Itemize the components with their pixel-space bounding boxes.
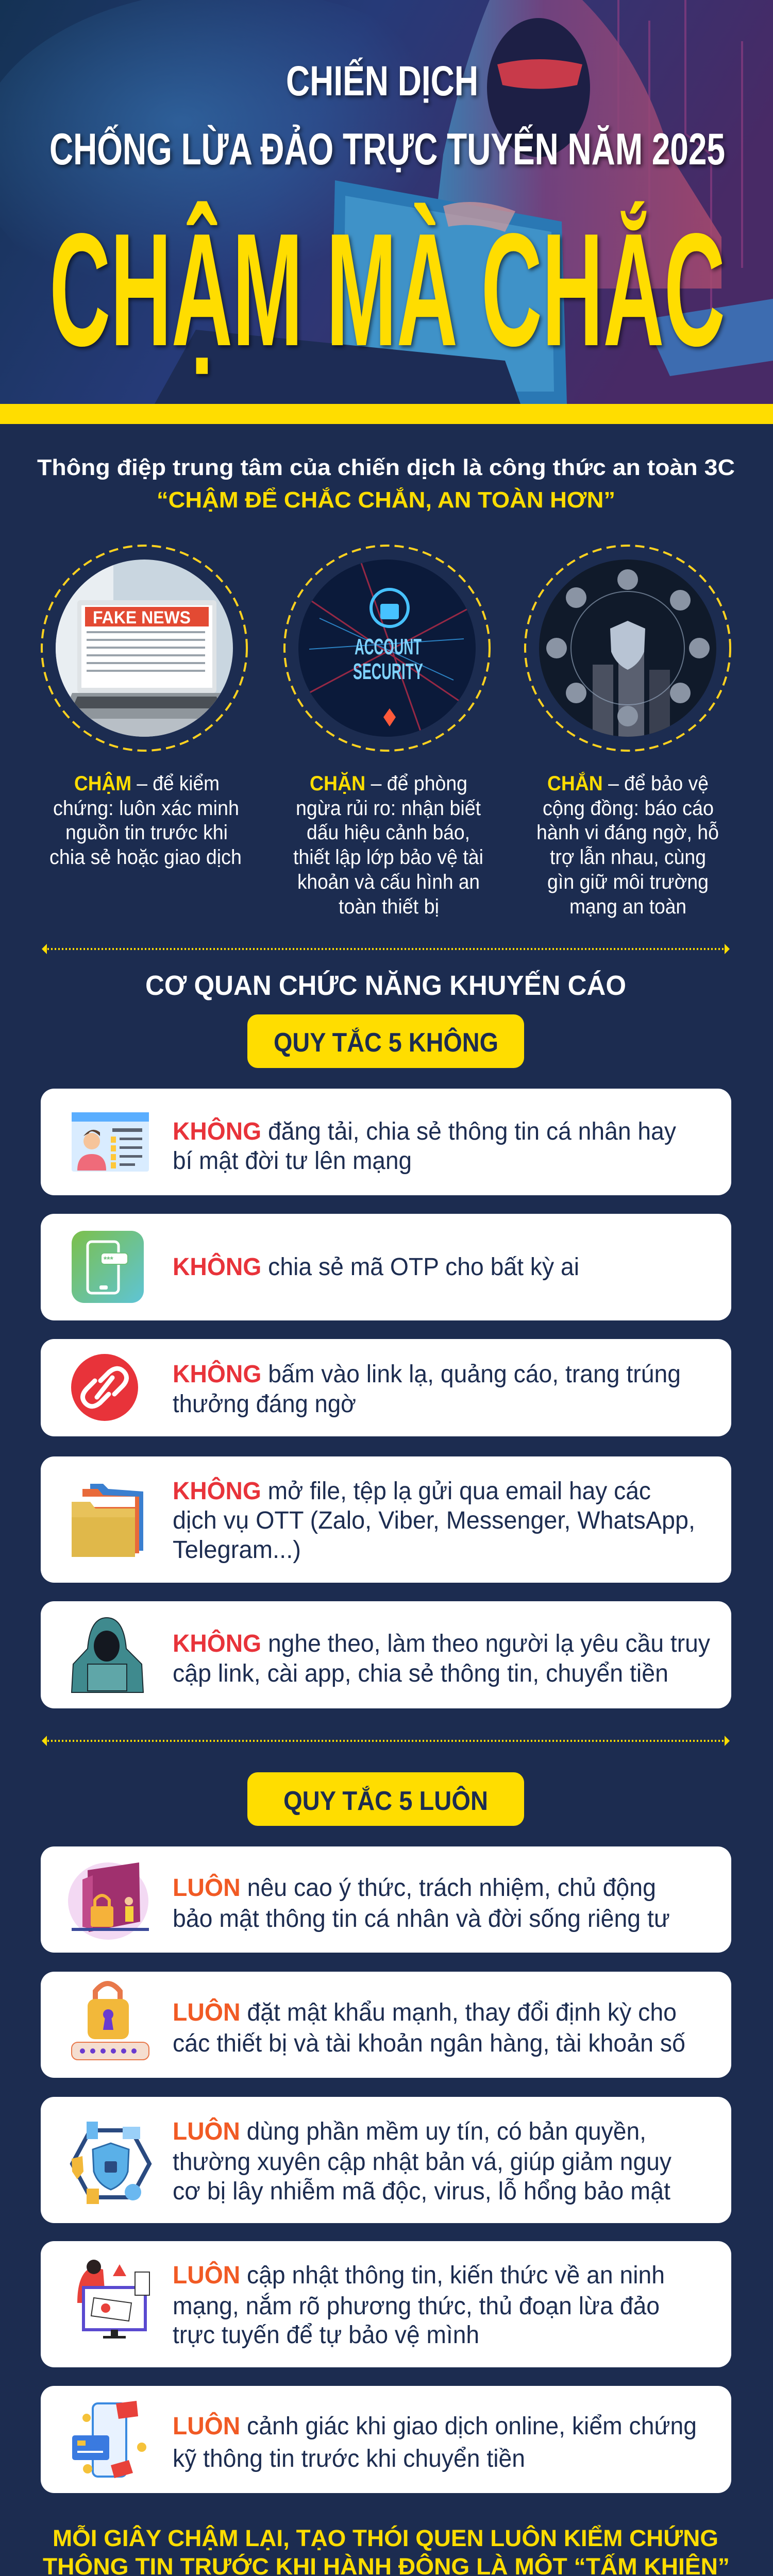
- subtitle: [37, 455, 735, 513]
- card: không 3: [41, 1339, 731, 1436]
- subtitle: Thông điệp trung tâm của chiến dịch là công thức an toàn 3C: [37, 455, 735, 480]
- panel: circle 2 account security: ACCOUNT: [355, 634, 422, 659]
- text block: CHẮN: [536, 771, 719, 918]
- card: luôn 4: trực tuyến để tự bảo vệ mình: [173, 2321, 479, 2349]
- card: luôn 4: LUÔN cập nhật thông tin, kiến thức về an ninh: [173, 2261, 665, 2289]
- text block: CHẶN: thiết lập lớp bảo vệ tài: [293, 846, 483, 869]
- icon: profile card: [72, 1112, 149, 1172]
- hero background illustration: [0, 0, 773, 404]
- card: luôn 3: thường xuyên cập nhật bản vá, giúp giảm nguy: [173, 2148, 671, 2176]
- card: luôn 4: [41, 2241, 731, 2367]
- card: không 5: cập link, cài app, chia sẻ thông tin, chuyển tiền: [173, 1660, 668, 1687]
- card: không 4: [41, 1456, 731, 1583]
- card: không 2: [41, 1214, 731, 1320]
- panel: circle 1 fake news: [42, 546, 247, 751]
- card: luôn 3: [41, 2097, 731, 2223]
- icon: OTP phone: [72, 1231, 144, 1303]
- heading button: 5 không: QUY TẮC 5 KHÔNG: [274, 1027, 498, 1058]
- card: không 4: dịch vụ OTT (Zalo, Viber, Messenger, WhatsApp,: [173, 1507, 695, 1534]
- text block: CHẶN: khoản và cấu hình an: [297, 871, 480, 893]
- icon: OTP phone: ***: [104, 1256, 113, 1264]
- text block: CHẬM: CHẬM – để kiểm: [74, 771, 220, 795]
- card: luôn 1: [41, 1846, 731, 1953]
- panel: circle 1 fake news: FAKE NEWS: [93, 608, 191, 628]
- card: không 5: [41, 1601, 731, 1708]
- closing message: MỖI GIÂY CHẬM LẠI, TẠO THÓI QUEN LUÔN KIỂM CHỨNG: [53, 2525, 718, 2551]
- icon: folders: [72, 1484, 143, 1557]
- card: luôn 1: bảo mật thông tin cá nhân và đời sống riêng tư: [173, 1905, 670, 1933]
- text block: CHẶN: CHẶN – để phòng: [310, 772, 467, 795]
- panel: circle 3 community network: [525, 546, 730, 751]
- card: luôn 5: LUÔN cảnh giác khi giao dịch online, kiểm chứng: [173, 2412, 697, 2440]
- card: luôn 2: [41, 1972, 731, 2078]
- text block: CHẬM: [49, 771, 242, 869]
- arrow: dotted divider 1: [42, 944, 730, 954]
- icon: link: [71, 1354, 138, 1421]
- text block: CHẶN: toàn thiết bị: [339, 895, 439, 918]
- icon: online payment phone: [72, 2401, 146, 2478]
- card: không 3: KHÔNG bấm vào link lạ, quảng cáo, trang trúng: [173, 1360, 681, 1388]
- text block: CHẶN: [293, 772, 483, 918]
- card: không 5: KHÔNG nghe theo, làm theo người lạ yêu cầu truy: [173, 1629, 710, 1657]
- text block: CHẮN: cộng đồng: báo cáo: [543, 797, 714, 820]
- card: luôn 3: LUÔN dùng phần mềm uy tín, có bản quyền,: [173, 2117, 646, 2145]
- card: không 1: KHÔNG đăng tải, chia sẻ thông tin cá nhân hay: [173, 1117, 676, 1145]
- icon: hacker: [72, 1618, 143, 1692]
- icon: security shield network: [72, 2122, 149, 2204]
- text block: CHẬM: nguồn tin trước khi: [65, 821, 228, 844]
- card: không 1: bí mật đời tư lên mạng: [173, 1147, 412, 1175]
- heading: recommendations: CƠ QUAN CHỨC NĂNG KHUYẾN CÁO: [145, 970, 626, 1001]
- panel: circle 2 account security: SECURITY: [353, 659, 423, 684]
- card: luôn 2: LUÔN đặt mật khẩu mạnh, thay đổi định kỳ cho: [173, 1998, 677, 2026]
- title: campaign: [49, 58, 725, 174]
- card: không 3: thưởng đáng ngờ: [173, 1391, 356, 1418]
- text block: CHẮN: trợ lẫn nhau, cùng: [550, 845, 706, 869]
- title: campaign: CHIẾN DỊCH: [286, 58, 478, 105]
- heading button: 5 luôn: [247, 1772, 524, 1826]
- text block: CHẮN: mạng an toàn: [569, 895, 686, 918]
- icon: privacy book: [68, 1862, 149, 1940]
- text block: CHẬM: chứng: luôn xác minh: [53, 797, 239, 820]
- card: không 2: KHÔNG chia sẻ mã OTP cho bất kỳ ai: [173, 1252, 579, 1281]
- card: luôn 4: mạng, nắm rõ phương thức, thủ đoạn lừa đảo: [173, 2292, 660, 2320]
- subtitle: “CHẬM ĐỂ CHẮC CHẮN, AN TOÀN HƠN”: [157, 486, 615, 513]
- card: không 4: Telegram...): [173, 1536, 301, 1564]
- panel: circle 2 account security: [284, 546, 490, 751]
- text block: CHẶN: ngừa rủi ro: nhận biết: [296, 797, 481, 820]
- icon: scam alert monitor: [77, 2260, 149, 2338]
- card: luôn 2: các thiết bị và tài khoản ngân hàng, tài khoản số: [173, 2030, 685, 2057]
- card: luôn 3: cơ bị lây nhiễm mã độc, virus, lỗ hổng bảo mật: [173, 2177, 670, 2205]
- text block: CHẮN: hành vi đáng ngờ, hỗ: [536, 821, 719, 844]
- heading button: 5 luôn: QUY TẮC 5 LUÔN: [283, 1786, 488, 1816]
- card: luôn 5: kỹ thông tin trước khi chuyển tiền: [173, 2445, 525, 2472]
- closing message: [43, 2525, 730, 2576]
- text block: CHẮN: gìn giữ môi trường: [547, 871, 709, 893]
- text block: CHẶN: dấu hiệu cảnh báo,: [307, 821, 470, 844]
- heading button: 5 không: [247, 1014, 524, 1068]
- icon: padlock password: [72, 1984, 149, 2060]
- card: không 4: KHÔNG mở file, tệp lạ gửi qua email hay các: [173, 1477, 651, 1505]
- arrow: dotted divider 2: [42, 1736, 730, 1746]
- card: luôn 5: [41, 2386, 731, 2493]
- card: không 1: [41, 1089, 731, 1195]
- text block: CHẮN: CHẮN – để bảo vệ: [547, 771, 709, 795]
- text block: CHẬM: chia sẻ hoặc giao dịch: [49, 846, 242, 869]
- card: luôn 1: LUÔN nêu cao ý thức, trách nhiệm, chủ động: [173, 1873, 656, 1902]
